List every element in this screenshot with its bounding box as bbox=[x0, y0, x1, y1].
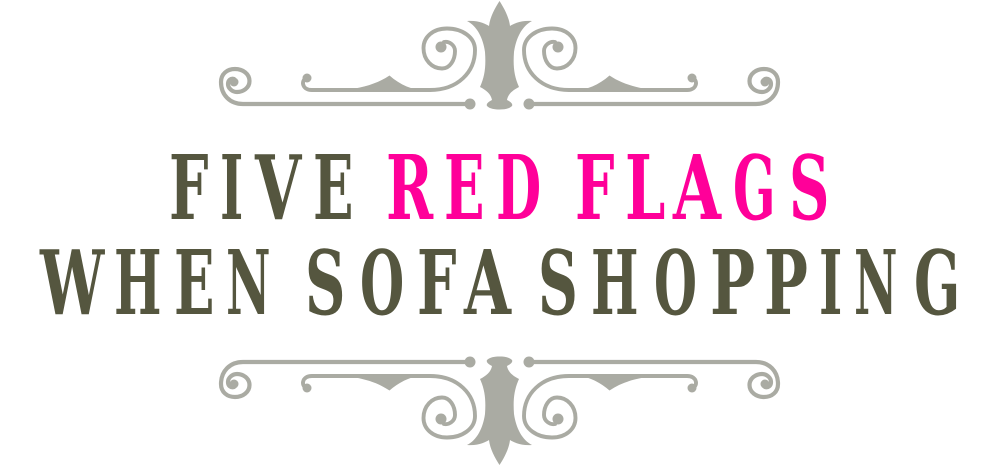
title: line one: E bbox=[313, 135, 354, 240]
title: line one: A bbox=[673, 135, 721, 240]
title: line two: I bbox=[819, 230, 843, 335]
ornament: top flourish bbox=[221, 1, 778, 110]
title: line one: I bbox=[220, 135, 244, 240]
title: line two: H bbox=[591, 230, 639, 335]
title: line one: V bbox=[255, 135, 301, 240]
title: line two: A bbox=[464, 230, 511, 335]
title: line two: P bbox=[710, 230, 755, 335]
title: line one: G bbox=[733, 135, 776, 240]
title: line one: F bbox=[169, 135, 208, 240]
title: line two: H bbox=[114, 230, 162, 335]
title: line two: G bbox=[914, 230, 961, 335]
title: line one: S bbox=[789, 135, 830, 240]
title: line two: O bbox=[654, 230, 696, 335]
title: line two: W bbox=[40, 230, 104, 335]
title: line two: S bbox=[538, 230, 578, 335]
title: line one: R bbox=[386, 135, 433, 240]
title: line two: P bbox=[764, 230, 808, 335]
title: line two: N bbox=[854, 230, 898, 335]
title: line two: N bbox=[226, 230, 271, 335]
title: line two: F bbox=[417, 230, 456, 335]
title: line one: L bbox=[625, 135, 666, 240]
title: line one bbox=[169, 135, 830, 240]
title: line one: D bbox=[496, 135, 541, 240]
ornament: bottom flourish bbox=[221, 356, 778, 465]
title: line two: O bbox=[360, 230, 404, 335]
title: line one: E bbox=[444, 135, 485, 240]
title: line two: E bbox=[174, 230, 215, 335]
title: line two: S bbox=[305, 230, 346, 335]
title: line one: F bbox=[575, 135, 614, 240]
title: line two bbox=[40, 230, 961, 335]
